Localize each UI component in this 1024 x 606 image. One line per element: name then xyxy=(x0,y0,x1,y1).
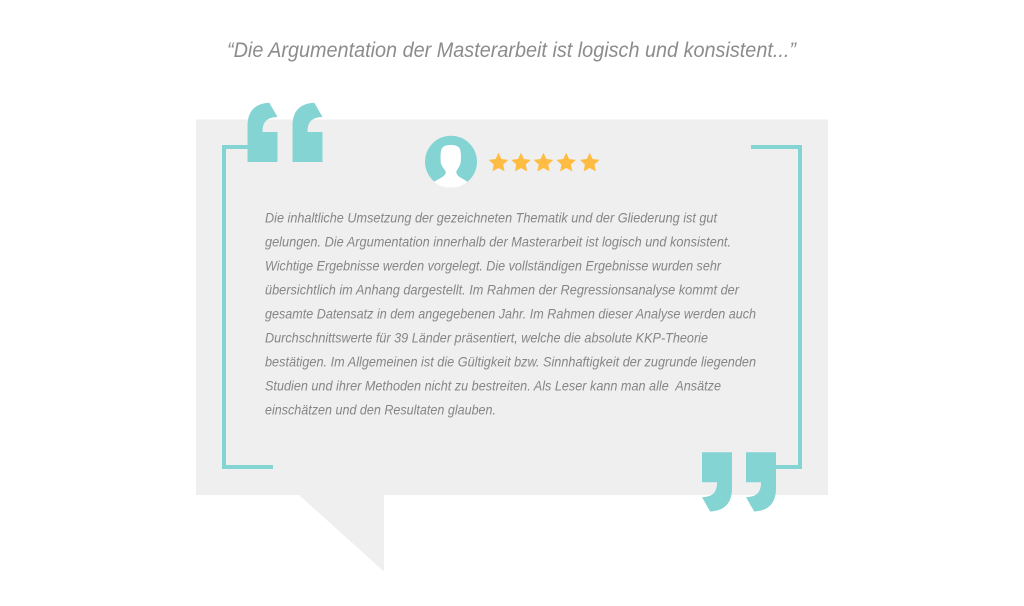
review body text: gesamte Datensatz in dem angegebenen Jahr. Im Rahmen dieser Analyse werden auch xyxy=(265,306,756,322)
icon: user avatar xyxy=(425,136,477,188)
panel: speech bubble xyxy=(196,120,828,572)
right teal bracket xyxy=(751,147,800,467)
review body text: Studien und ihrer Methoden nicht zu bestreiten. Als Leser kann man alle Ansätze xyxy=(265,378,721,394)
review body text: Die inhaltliche Umsetzung der gezeichneten Thematik und der Gliederung ist gut xyxy=(265,210,718,226)
review body text: bestätigen. Im Allgemeinen ist die Gültigkeit bzw. Sinnhaftigkeit der zugrunde liegenden xyxy=(265,354,756,370)
icon: opening quotation marks xyxy=(248,103,322,162)
icon: five star rating xyxy=(489,153,600,171)
review body text: gelungen. Die Argumentation innerhalb der Masterarbeit ist logisch und konsistent. xyxy=(265,234,731,250)
review body text xyxy=(265,210,756,418)
icon: closing quotation marks xyxy=(702,452,776,512)
review body text: Wichtige Ergebnisse werden vorgelegt. Die vollständigen Ergebnisse wurden sehr xyxy=(265,258,722,274)
review body text: Durchschnittswerte für 39 Länder präsentiert, welche die absolute KKP-Theorie xyxy=(265,330,708,346)
left teal bracket xyxy=(224,147,273,467)
title quote: “Die Argumentation der Masterarbeit ist logisch und konsistent...” xyxy=(227,39,797,62)
review body text: einschätzen und den Resultaten glauben. xyxy=(265,402,496,418)
review body text: übersichtlich im Anhang dargestellt. Im Rahmen der Regressionsanalyse kommt der xyxy=(265,282,740,298)
